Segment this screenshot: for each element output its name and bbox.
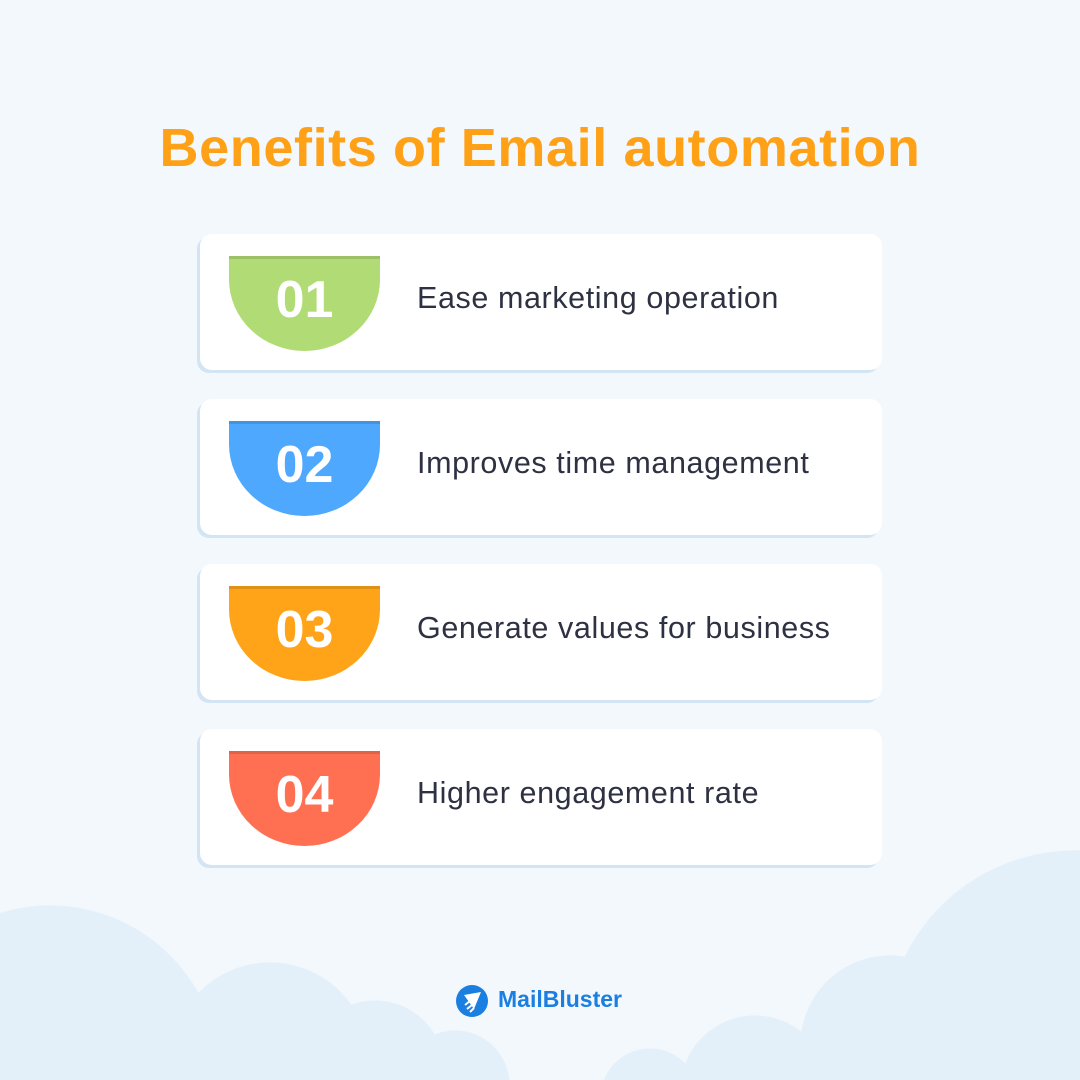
- logo text: MailBluster: [498, 986, 622, 1012]
- badge 03: [229, 586, 380, 681]
- title: Benefits of Email automation: [160, 118, 920, 178]
- card 3: [200, 564, 882, 700]
- badge 02: [229, 421, 380, 516]
- badge 03: 03: [276, 601, 333, 659]
- badge 02: 02: [276, 436, 333, 494]
- icon: logo: [456, 985, 488, 1017]
- card 4: [200, 729, 882, 865]
- badge 04: [229, 751, 380, 846]
- badge 04: 04: [276, 766, 333, 824]
- badge 01: 01: [276, 271, 333, 329]
- text 2: Improves time management: [417, 446, 809, 480]
- text 3: Generate values for business: [417, 611, 831, 645]
- clouds decoration: [0, 840, 1080, 1080]
- badge 01: [229, 256, 380, 351]
- card 2: [200, 399, 882, 535]
- text 1: Ease marketing operation: [417, 281, 779, 315]
- text 4: Higher engagement rate: [417, 776, 759, 810]
- logo: [456, 985, 622, 1017]
- card 1: [200, 234, 882, 370]
